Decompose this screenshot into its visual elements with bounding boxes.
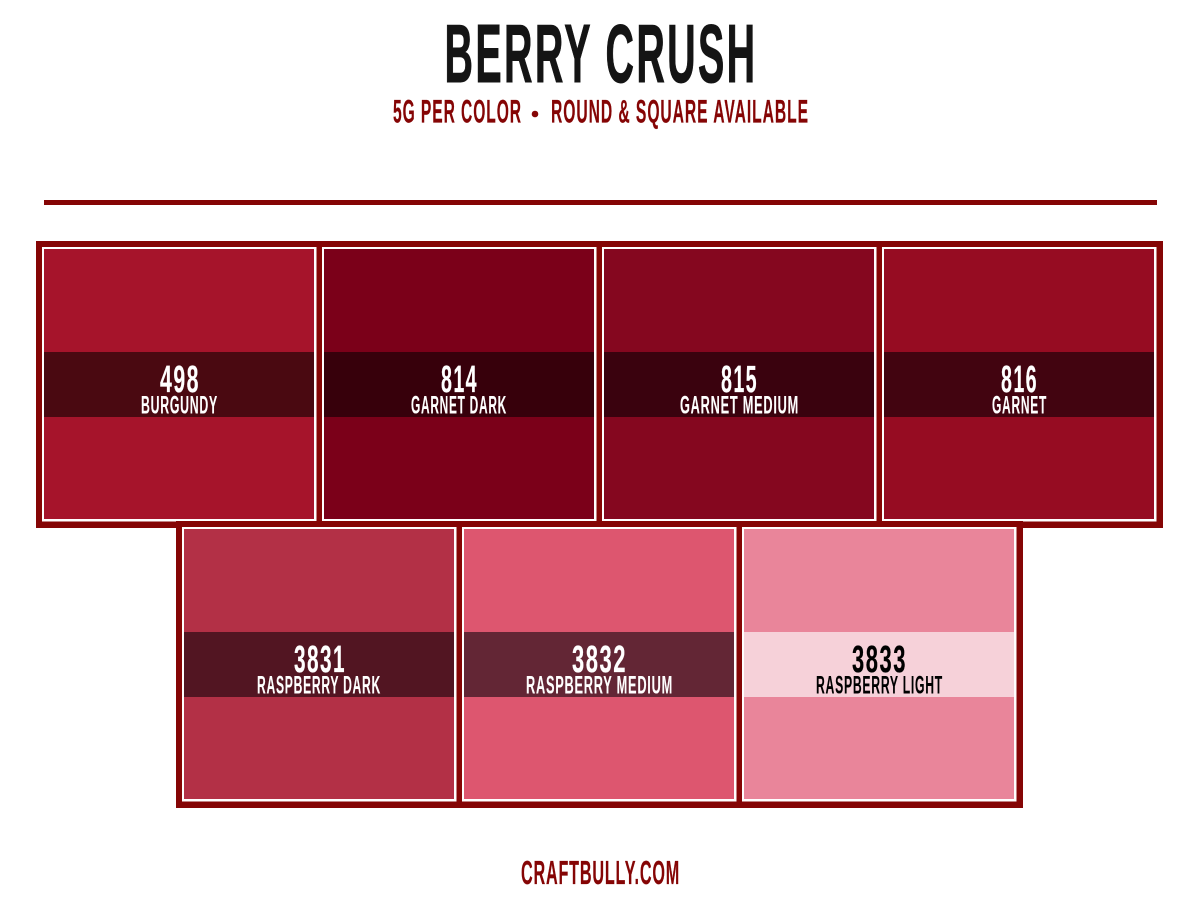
- text: CRAFTBULLY.COM: [521, 854, 680, 891]
- swatch: 3831 raspberry dark: [182, 527, 456, 802]
- swatch: 498 burgundy: 498: [160, 359, 200, 401]
- text: BERRY CRUSH: [444, 7, 758, 100]
- divider: [44, 200, 1157, 205]
- subtitle: [393, 94, 809, 130]
- swatch: 3831 raspberry dark: 3831: [294, 639, 346, 681]
- swatch: 3833 raspberry light: RASPBERRY LIGHT: [816, 672, 943, 700]
- swatch: 3831 raspberry dark: RASPBERRY DARK: [257, 672, 381, 700]
- panel: bottom row swatches: [176, 521, 1023, 808]
- swatch: 815 garnet medium: 815: [721, 359, 758, 401]
- swatch: 498 burgundy: BURGUNDY: [141, 392, 218, 420]
- swatch: 816 garnet: 816: [1001, 359, 1038, 401]
- text: ROUND & SQUARE AVAILABLE: [551, 94, 809, 130]
- swatch: 3833 raspberry light: [742, 527, 1016, 802]
- swatch: 815 garnet medium: [602, 247, 876, 522]
- swatch: 814 garnet dark: 814: [441, 359, 478, 401]
- panel: top row swatches: [36, 241, 1163, 528]
- swatch: 3832 raspberry medium: [462, 527, 736, 802]
- swatch: 3832 raspberry medium: RASPBERRY MEDIUM: [526, 672, 673, 700]
- swatch: 3833 raspberry light: 3833: [852, 639, 907, 681]
- swatch: 816 garnet: GARNET: [992, 392, 1047, 420]
- swatch: 498 burgundy: [42, 247, 316, 522]
- swatch: 815 garnet medium: GARNET MEDIUM: [680, 392, 799, 420]
- swatch: 814 garnet dark: GARNET DARK: [411, 392, 507, 420]
- swatch: 3832 raspberry medium: 3832: [572, 639, 627, 681]
- swatch: 814 garnet dark: [322, 247, 596, 522]
- swatch: 816 garnet: [882, 247, 1156, 522]
- subtitle: 5G PER COLOR: [393, 94, 522, 130]
